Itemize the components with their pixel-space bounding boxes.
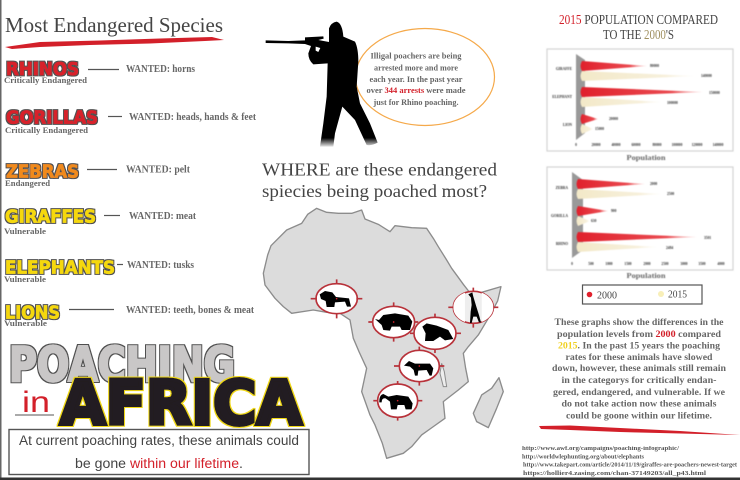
x axis labels: 120000	[692, 143, 703, 147]
chart: giraffe elephant lion population: 100000	[667, 101, 678, 105]
bars: rhino	[576, 232, 697, 252]
callout: arrests speech ellipse: each year. In the past year	[370, 74, 463, 84]
panel: most endangered species	[4, 13, 257, 328]
target: zebra	[394, 347, 444, 386]
x axis labels: 3500	[698, 262, 706, 266]
x axis labels: 500	[588, 262, 594, 266]
heading: most endangered species: Most Endangered Species	[5, 13, 223, 37]
x axis labels: 0	[571, 262, 573, 266]
text block: graph explanation: do not take action now these animals	[562, 400, 717, 410]
heading: population compared	[559, 12, 718, 42]
legend: 2000 and 2015: 2000	[597, 290, 617, 302]
text block: graph explanation: population levels from 2000 compared	[557, 330, 722, 340]
text block: source urls: http://worldwlephunting.org/about/elephants	[522, 454, 645, 460]
species: giraffes	[4, 206, 197, 236]
title word: africa: AFRICA	[60, 368, 302, 439]
title word: in: in	[22, 386, 50, 419]
species: rhinos: RHINOS	[6, 59, 79, 80]
species: elephants: ELEPHANTS	[5, 258, 115, 278]
text block: source urls: https://hollier4.zasing.com/chan-37149203/all_p43.html	[523, 471, 706, 477]
callout: within our lifetime: At current poaching rates, these animals could	[19, 433, 299, 448]
text block: graph explanation: These graphs show the differences in the	[554, 318, 724, 328]
callout: arrests speech ellipse: just for Rhino poaching.	[373, 97, 458, 107]
chart: giraffe elephant lion population: 15000	[595, 127, 604, 131]
species: giraffes: WANTED: meat	[129, 211, 197, 222]
species: elephants: Vulnerable	[4, 275, 46, 284]
target: giraffe	[448, 288, 498, 328]
x axis labels: 2500	[661, 262, 669, 266]
chart: giraffe elephant lion population: Population	[626, 153, 666, 162]
text block: graph explanation: could be goone within our lifetime.	[566, 412, 712, 422]
bars: giraffe	[580, 61, 695, 81]
target: rhino	[368, 302, 418, 342]
chart: zebra gorilla rhino population: ZEBRA	[556, 186, 568, 190]
heading: where are species poached	[262, 160, 497, 201]
chart: giraffe elephant lion population: 20000	[609, 117, 618, 121]
callout: arrests speech ellipse: over 344 arrests were made	[366, 85, 466, 95]
text block: source urls: http://www.awf.org/campaigns/poaching-infographic/	[522, 446, 679, 452]
red brush underline	[5, 37, 224, 49]
bars: elephant	[580, 87, 703, 107]
x axis labels: 20000	[592, 143, 601, 147]
species: giraffes: GIRAFFES	[5, 206, 96, 228]
species: gorillas: Critically Endangered	[5, 126, 89, 135]
chart: giraffe elephant lion population: ELEPHANT	[552, 95, 573, 99]
text block: graph explanation: rates for these animals have slowed	[566, 353, 713, 363]
title word: poaching: POACHING	[9, 338, 235, 393]
species: lions: LIONS	[5, 302, 60, 324]
x axis labels: 1000	[605, 262, 613, 266]
red brush divider	[539, 426, 740, 435]
x axis labels: 40000	[612, 143, 621, 147]
x axis labels: 4000	[717, 262, 725, 266]
species: zebras: ZEBRAS	[6, 162, 79, 182]
x axis labels: 80000	[653, 143, 662, 147]
chart: zebra gorilla rhino population: 900	[611, 209, 617, 213]
x axis labels: 3000	[680, 262, 688, 266]
heading: population compared: TO THE 2000'S	[603, 27, 674, 42]
x axis labels: 60000	[632, 143, 641, 147]
species: gorillas: WANTED: heads, hands & feet	[129, 112, 257, 123]
species: lions: WANTED: teeth, bones & meat	[126, 305, 255, 316]
species: gorillas: GORILLAS	[6, 108, 98, 128]
x axis labels	[575, 143, 724, 147]
x axis labels: 100000	[672, 143, 683, 147]
chart: giraffe elephant lion population: GIRAFFE	[556, 67, 573, 71]
africa outline	[263, 208, 501, 458]
chart: giraffe elephant lion population: 140000	[701, 74, 712, 78]
panel: poaching in africa title	[9, 338, 309, 474]
target: elephant	[373, 381, 422, 421]
bars: lion	[580, 114, 598, 134]
x axis labels	[571, 262, 725, 266]
callout: within our lifetime	[9, 430, 309, 474]
chart: zebra gorilla rhino population: GORILLA	[551, 214, 568, 218]
legend: 2000 and 2015	[582, 285, 702, 304]
text block: graph explanation: down, however, these animals still remain	[552, 364, 727, 374]
chart: giraffe elephant lion population: LION	[563, 123, 572, 127]
x axis labels: 0	[575, 143, 577, 147]
map: africa with target markers	[263, 208, 503, 458]
chart: zebra gorilla rhino population: RHINO	[556, 242, 568, 246]
x axis labels: 2000	[643, 262, 651, 266]
target: gorilla	[410, 314, 461, 353]
chart: zebra gorilla rhino population: 2000	[650, 182, 657, 186]
chart: giraffe elephant lion population: 150000	[709, 91, 720, 95]
chart: giraffe elephant lion population	[547, 49, 733, 162]
callout: within our lifetime: be gone within our lifetime .	[75, 456, 243, 471]
madagascar	[473, 378, 503, 428]
species: elephants	[4, 258, 194, 284]
chart: zebra gorilla rhino population	[547, 167, 733, 280]
callout: arrests speech ellipse	[356, 28, 494, 126]
bars: zebra	[576, 179, 662, 199]
x axis labels: 1500	[624, 262, 632, 266]
x axis labels: 140000	[713, 143, 724, 147]
chart: zebra gorilla rhino population: 630	[591, 219, 597, 223]
chart: zebra gorilla rhino population: 3501	[704, 236, 711, 240]
heading: population compared: 2015 POPULATION COMPARED	[559, 12, 718, 27]
species: zebras	[5, 162, 191, 188]
species: rhinos: Critically Endangered	[4, 76, 88, 85]
text block: graph explanation: 2015. In the past 15 years the poaching	[558, 342, 720, 352]
species: gorillas	[5, 108, 257, 135]
species: lions: Vulnerable	[4, 319, 48, 328]
chart: zebra gorilla rhino population: 2500	[667, 192, 674, 196]
chart: giraffe elephant lion population: 80000	[650, 64, 659, 68]
species: giraffes: Vulnerable	[4, 227, 46, 236]
heading: where are species poached: spiecies being poached most?	[262, 181, 487, 201]
species: rhinos: WANTED: horns	[126, 64, 195, 75]
callout: arrests speech ellipse: Illigal poachers are being	[370, 50, 462, 60]
chart: zebra gorilla rhino population: 2484	[666, 246, 673, 250]
species: lions	[4, 302, 255, 328]
text block: source urls: http://www.takepart.com/article/2014/11/19/giraffes-are-poachers-newest-target	[523, 462, 737, 468]
heading: where are species poached: WHERE are these endangered	[262, 160, 497, 180]
icon: poacher silhouette with rifle	[266, 22, 378, 147]
legend: 2000 and 2015: 2015	[668, 290, 687, 300]
chart: zebra gorilla rhino population: Population	[626, 271, 666, 280]
callout: arrests speech ellipse: arrested more and more	[374, 62, 458, 72]
species: rhinos	[4, 59, 195, 85]
lake	[440, 363, 447, 387]
bars: gorilla	[576, 206, 608, 226]
text block: source urls	[522, 446, 737, 477]
text block: graph explanation: gered, endangered, and vulnerable. If we	[553, 388, 725, 398]
text block: graph explanation: in the categorys for critically endan-	[562, 376, 716, 386]
species: zebras: Endangered	[5, 179, 51, 188]
target: lion	[311, 279, 362, 318]
species: zebras: WANTED: pelt	[126, 164, 191, 176]
species: elephants: WANTED: tusks	[127, 260, 194, 271]
text block: graph explanation	[552, 318, 727, 422]
